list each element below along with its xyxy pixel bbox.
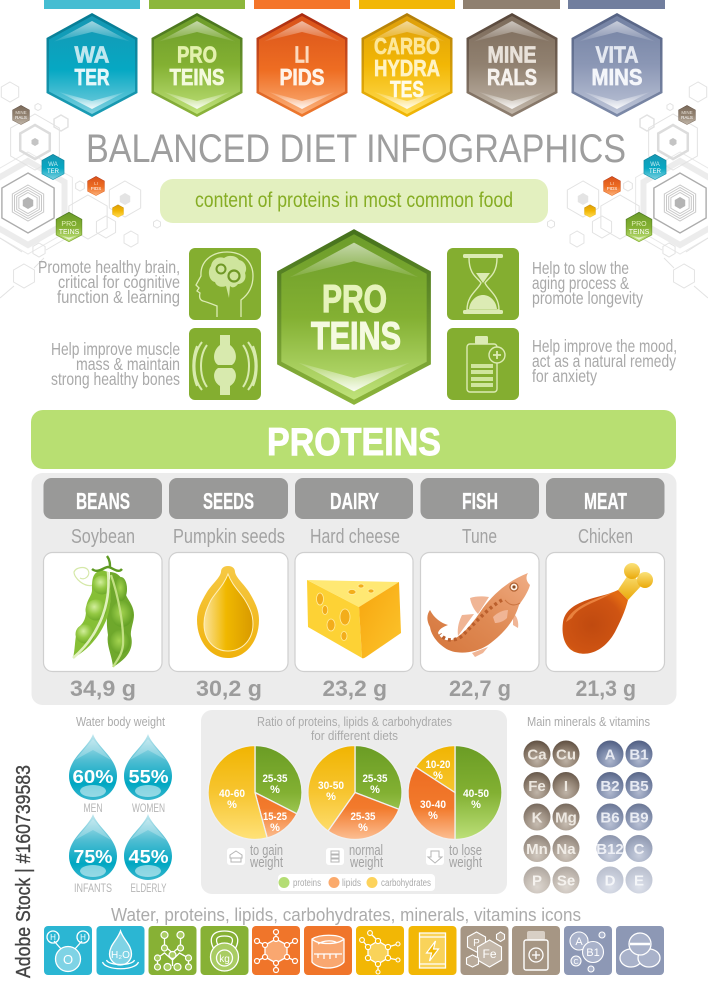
subtitle pill bbox=[160, 179, 548, 223]
caption: icons row: Water, proteins, lipids, carbohydrates, minerals, vitamins icons bbox=[111, 905, 581, 925]
drop: elderly 45%: 45% bbox=[128, 847, 168, 867]
pie chart: to lose weight: 10-20 bbox=[426, 759, 450, 771]
hexagon: water bbox=[46, 13, 138, 117]
subtitle pill: content of proteins in most common food bbox=[195, 189, 513, 212]
caption: to gain weight bbox=[227, 842, 284, 871]
minerals grid: Mn bbox=[526, 841, 548, 858]
pie chart: to gain weight: 15-25 bbox=[263, 811, 287, 823]
hexagon: water: WA bbox=[74, 42, 110, 68]
icon: vitamin bubbles bbox=[564, 926, 612, 975]
hexagon: proteins: TEINS bbox=[170, 64, 224, 90]
icon: pumpkin seed bbox=[197, 566, 259, 658]
icon: mineral hexagons bbox=[460, 926, 508, 975]
icon: water drop: H₂O bbox=[111, 950, 130, 961]
icon: measuring tape bbox=[304, 926, 352, 975]
pie chart: to gain weight: 40-60 bbox=[219, 788, 245, 800]
small hexagon badges: left bbox=[12, 105, 124, 242]
hexagon: lipids bbox=[256, 13, 348, 117]
text: mood benefit: for anxiety bbox=[532, 366, 597, 386]
small hexagon badges: left: TEINS bbox=[59, 229, 80, 236]
hexagon: carbohydrates: HYDRA bbox=[374, 55, 440, 81]
hexagon: minerals: RALS bbox=[487, 64, 537, 90]
column: seeds: 30,2 g bbox=[196, 676, 262, 701]
text: aging benefit: Help to slow the bbox=[532, 258, 629, 278]
small hexagon badges: right: MINE bbox=[681, 110, 693, 115]
icon: mineral hexagons: Fe bbox=[482, 947, 497, 961]
legend: lipids bbox=[342, 878, 361, 889]
panel: diet ratios bbox=[201, 710, 507, 894]
icon: joint bbox=[189, 328, 261, 400]
column: beans bbox=[44, 478, 162, 701]
icon: kettlebell: kg bbox=[219, 954, 230, 965]
drop: infants 75%: INFANTS bbox=[74, 881, 112, 895]
icon: mineral hexagons: P bbox=[473, 938, 480, 949]
icon: fish bbox=[427, 573, 530, 657]
text: muscle benefit: strong healthy bones bbox=[51, 369, 180, 389]
title: BALANCED DIET INFOGRAPHICS bbox=[86, 127, 626, 171]
hexagon: proteins bbox=[152, 13, 242, 117]
legend: proteins bbox=[293, 878, 321, 889]
minerals grid: Na bbox=[556, 841, 576, 858]
icon: protein molecule bbox=[148, 926, 196, 975]
vitamins grid: B6 bbox=[600, 810, 620, 826]
vitamins grid bbox=[596, 740, 652, 894]
minerals grid: Se bbox=[557, 872, 575, 890]
hexagon: carbohydrates: CARBO bbox=[374, 33, 440, 59]
caption: normal weight bbox=[326, 842, 384, 871]
column: beans: BEANS bbox=[76, 488, 130, 514]
pie chart: normal weight bbox=[308, 746, 402, 840]
drop: women 55% bbox=[124, 734, 172, 815]
icon: battery bbox=[447, 328, 519, 400]
column: fish: FISH bbox=[462, 488, 498, 514]
legend bbox=[278, 874, 435, 891]
caption: to lose weight: to lose bbox=[449, 842, 482, 859]
drop: men 60%: MEN bbox=[84, 801, 102, 815]
column: seeds: Pumpkin seeds bbox=[173, 526, 285, 548]
drop: women 55%: WOMEN bbox=[132, 801, 165, 815]
icon: water drop bbox=[96, 926, 144, 975]
icon: vitamin bubbles: B1 bbox=[586, 947, 600, 959]
text: muscle benefit: Help improve muscle bbox=[51, 339, 180, 359]
small hexagon badges: left: LI bbox=[94, 181, 98, 186]
column: fish: 22,7 g bbox=[449, 676, 511, 701]
hexagon: vitamins: MINS bbox=[592, 64, 642, 90]
minerals grid: I bbox=[564, 778, 568, 795]
small hexagon badges: right: TEINS bbox=[629, 229, 650, 236]
drop: elderly 45%: ELDERLY bbox=[130, 881, 166, 895]
pie chart: normal weight: % bbox=[358, 822, 368, 834]
icon: supplement bottle bbox=[512, 926, 560, 975]
column: fish: Tune bbox=[462, 526, 497, 548]
column: fish bbox=[420, 478, 539, 701]
drop: infants 75%: 75% bbox=[74, 847, 112, 867]
icon: soybean bbox=[73, 556, 134, 667]
hexagon: carbohydrates bbox=[362, 13, 452, 117]
minerals grid: Mg bbox=[555, 810, 577, 826]
small hexagon badges: right: PIDS bbox=[607, 186, 617, 191]
column: seeds bbox=[169, 478, 288, 701]
caption: to gain weight: to gain bbox=[250, 842, 283, 859]
vitamins grid: B12 bbox=[596, 841, 624, 858]
central hexagon: proteins: TEINS bbox=[311, 315, 401, 358]
caption: to lose weight bbox=[426, 842, 483, 871]
icon: vitamin bubbles: A bbox=[575, 936, 583, 948]
icon: oxygen molecule bbox=[44, 926, 92, 975]
minerals grid: K bbox=[532, 810, 543, 826]
icon: vitamin bubbles: C bbox=[573, 959, 579, 966]
icon: pills bbox=[616, 926, 664, 975]
heading: diet ratios: for different diets bbox=[311, 728, 398, 743]
text: brain benefit bbox=[38, 257, 180, 307]
drop: elderly 45% bbox=[124, 814, 172, 895]
column: meat: MEAT bbox=[584, 488, 627, 514]
small hexagon badges: left: RALS bbox=[15, 115, 27, 120]
caption: normal weight: normal bbox=[349, 842, 383, 859]
drop: women 55%: 55% bbox=[128, 767, 168, 787]
banner: proteins bbox=[31, 410, 676, 469]
text: brain benefit: critical for cognitive bbox=[58, 272, 180, 292]
pie chart: to lose weight: % bbox=[433, 770, 443, 782]
heading: minerals and vitamins: Main minerals & vitamins bbox=[527, 714, 650, 729]
column: seeds: SEEDS bbox=[203, 488, 254, 514]
icon: cheese bbox=[307, 580, 401, 658]
icon: carbohydrate molecule bbox=[356, 926, 404, 975]
icon: oxygen molecule: H bbox=[80, 933, 86, 942]
vitamins grid: A bbox=[605, 746, 616, 764]
minerals grid: Ca bbox=[527, 746, 547, 764]
small hexagon badges: right: RALS bbox=[681, 115, 693, 120]
pie chart: to lose weight: % bbox=[428, 810, 438, 822]
heading: diet ratios bbox=[257, 714, 452, 743]
small hexagon badges: left: TER bbox=[47, 169, 60, 175]
icon: oxygen molecule: H bbox=[50, 933, 56, 942]
pie chart: to lose weight: % bbox=[471, 799, 481, 811]
column: meat: 21,3 g bbox=[576, 676, 636, 701]
decorative hexagon pattern: right bbox=[548, 82, 708, 298]
hexagon: vitamins bbox=[572, 13, 662, 117]
pie chart: to lose weight bbox=[408, 746, 502, 840]
banner: proteins: PROTEINS bbox=[267, 421, 441, 464]
hexagon: minerals: MINE bbox=[488, 42, 536, 68]
column: meat: Chicken bbox=[578, 526, 633, 548]
pie chart: normal weight: 25-35 bbox=[350, 811, 376, 823]
hexagon: proteins: PRO bbox=[177, 42, 217, 68]
caption: normal weight: weight bbox=[349, 854, 384, 871]
pie chart: to gain weight: 25-35 bbox=[262, 773, 288, 785]
pie chart: to gain weight: % bbox=[227, 799, 237, 811]
caption: to gain weight: weight bbox=[249, 854, 284, 871]
stock credit: Adobe Stock | #160739583 bbox=[13, 765, 35, 978]
pie chart: to lose weight: 30-40 bbox=[420, 799, 446, 811]
hexagon: vitamins: VITA bbox=[596, 42, 639, 68]
column: dairy: Hard cheese bbox=[310, 526, 400, 548]
icon: lipid molecule bbox=[252, 926, 300, 975]
hexagon: lipids: LI bbox=[294, 42, 310, 68]
vitamins grid: B1 bbox=[629, 746, 649, 764]
drop: men 60%: 60% bbox=[72, 767, 114, 787]
hexagon: minerals bbox=[466, 13, 558, 117]
small hexagon badges: right: PRO bbox=[631, 221, 647, 228]
text: aging benefit: promote longevity bbox=[532, 288, 643, 308]
pie chart: normal weight: % bbox=[370, 784, 380, 796]
top colour bars bbox=[44, 0, 665, 9]
heading: water body weight: Water body weight bbox=[76, 714, 165, 729]
icon: kettlebell bbox=[200, 926, 248, 975]
vitamins grid: B2 bbox=[600, 778, 620, 795]
minerals grid bbox=[524, 740, 580, 894]
pie chart: normal weight: 25-35 bbox=[362, 773, 388, 785]
drop: infants 75% bbox=[69, 814, 117, 895]
column: beans: 34,9 g bbox=[70, 676, 136, 701]
pie chart: normal weight: % bbox=[326, 791, 336, 803]
icon: brain bbox=[189, 248, 261, 320]
central hexagon: proteins bbox=[277, 229, 431, 405]
legend: carbohydrates bbox=[381, 878, 431, 889]
column: dairy bbox=[295, 478, 413, 701]
column: meat bbox=[546, 478, 664, 701]
text: mood benefit bbox=[532, 336, 677, 386]
panel: food sources bbox=[32, 473, 676, 705]
icon: hourglass bbox=[447, 248, 519, 320]
column: beans: Soybean bbox=[71, 526, 135, 548]
decorative hexagon pattern: left bbox=[0, 82, 160, 298]
pie chart: to gain weight: % bbox=[270, 784, 280, 796]
text: brain benefit: function & learning bbox=[57, 287, 180, 307]
icon: energy bar bbox=[408, 926, 456, 975]
caption: to lose weight: weight bbox=[448, 854, 483, 871]
vitamins grid: D bbox=[605, 872, 616, 890]
small hexagon badges: left: WA bbox=[48, 162, 58, 168]
text: aging benefit bbox=[532, 258, 643, 308]
column: dairy: 23,2 g bbox=[322, 676, 387, 701]
central hexagon: proteins: PRO bbox=[322, 278, 387, 321]
drop: men 60% bbox=[69, 734, 117, 815]
pie chart: to lose weight: 40-50 bbox=[463, 788, 489, 800]
vitamins grid: E bbox=[634, 872, 644, 890]
pie chart: to gain weight: % bbox=[270, 822, 280, 834]
small hexagon badges: right bbox=[584, 105, 696, 242]
small hexagon badges: left: PIDS bbox=[91, 186, 101, 191]
vitamins grid: B5 bbox=[629, 778, 649, 795]
hexagon: carbohydrates: TES bbox=[390, 76, 424, 102]
small hexagon badges: left: PRO bbox=[61, 221, 77, 228]
text: muscle benefit bbox=[51, 339, 180, 389]
pie chart: normal weight: 30-50 bbox=[318, 780, 344, 792]
column: dairy: DAIRY bbox=[330, 488, 379, 514]
minerals grid: P bbox=[532, 872, 542, 890]
hexagon: lipids: PIDS bbox=[280, 64, 324, 90]
icon: oxygen molecule: O bbox=[63, 952, 73, 967]
icon: chicken leg bbox=[563, 563, 653, 654]
hexagon: water: TER bbox=[74, 64, 110, 90]
text: aging benefit: aging process & bbox=[532, 273, 629, 293]
small hexagon badges: right: WA bbox=[650, 162, 660, 168]
small hexagon badges: left: MINE bbox=[15, 110, 27, 115]
pie chart: to gain weight bbox=[208, 746, 302, 840]
text: muscle benefit: mass & maintain bbox=[76, 354, 180, 374]
small hexagon badges: right: TER bbox=[649, 169, 662, 175]
minerals grid: Fe bbox=[528, 778, 546, 795]
vitamins grid: C bbox=[634, 841, 645, 858]
minerals grid: Cu bbox=[556, 746, 576, 764]
heading: diet ratios: Ratio of proteins, lipids & carbohydrates bbox=[257, 714, 452, 729]
text: brain benefit: Promote healthy brain, bbox=[38, 257, 180, 277]
vitamins grid: B9 bbox=[629, 810, 649, 826]
small hexagon badges: right: LI bbox=[610, 181, 614, 186]
